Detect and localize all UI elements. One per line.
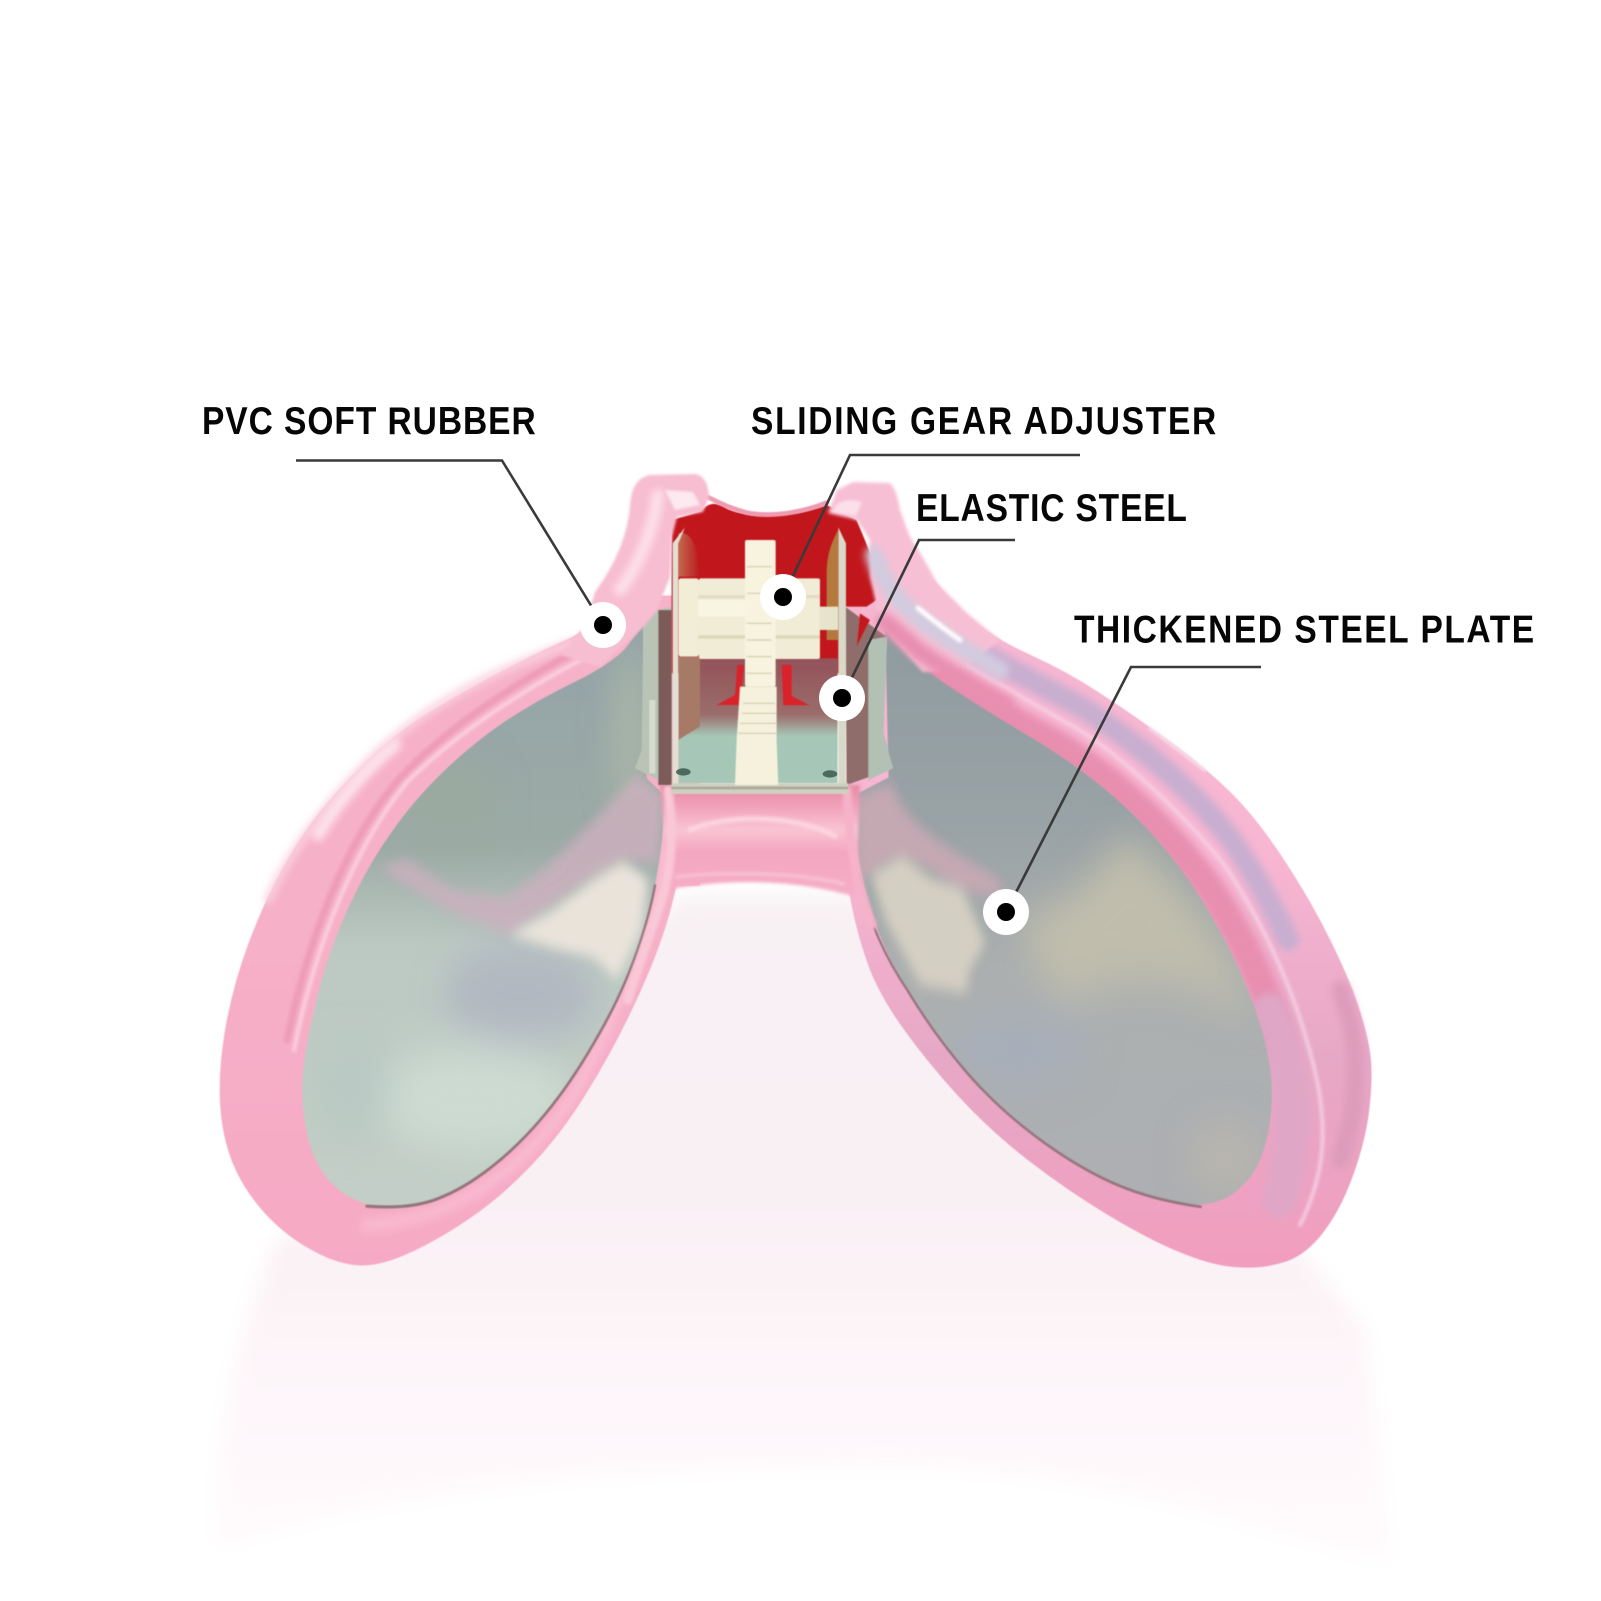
steel frame bars: [672, 527, 848, 794]
right rim lower lilac band: [1270, 1010, 1292, 1200]
right rim lavender band: [935, 628, 1288, 940]
left rim groove shade: [287, 644, 590, 1040]
right lens cream highlight: [871, 856, 985, 993]
leader line: thickened steel plate: [1006, 667, 1261, 912]
left lens pink band: [380, 774, 665, 935]
right wing: [846, 580, 1372, 1268]
leader line: PVC soft rubber: [296, 460, 603, 625]
bridge between wings: [628, 785, 872, 1000]
left neck clip notch: [665, 490, 700, 510]
callout: elastic steel: [819, 486, 1187, 721]
label: elastic steel: ELASTIC STEEL: [916, 486, 1187, 530]
red feet: [717, 665, 809, 705]
left wing: [220, 596, 700, 1265]
bridge lower line: [675, 874, 845, 884]
right rim upper glint: [1150, 728, 1205, 770]
right neck of rubber shell: [828, 482, 1000, 672]
left lens dark edge: [367, 886, 655, 1207]
right wing rim: [846, 580, 1372, 1268]
right lens pink band: [855, 782, 1003, 895]
left wing rim: [220, 596, 700, 1265]
lower chamber reflection: [678, 657, 838, 783]
marker: sliding gear adjuster: [760, 574, 806, 620]
rust side strips: [678, 530, 838, 640]
left lens cream highlight: [510, 861, 648, 979]
marker: PVC soft rubber: [580, 602, 626, 648]
bridge highlight arc: [690, 819, 835, 836]
left neck of rubber shell: [560, 474, 709, 667]
leader line: sliding gear adjuster: [783, 455, 1080, 597]
marker: elastic steel: [819, 675, 865, 721]
red housing: [672, 504, 877, 673]
right rim outer tone: [1340, 990, 1356, 1160]
right steel side: [845, 607, 893, 785]
label: PVC soft rubber: PVC SOFT RUBBER: [202, 399, 536, 443]
bridge body: [660, 785, 860, 897]
left lens reflection patches: [394, 661, 642, 1147]
callout: thickened steel plate: [983, 607, 1534, 935]
right rim ridge: [890, 625, 1323, 1225]
right neck lavender highlight: [874, 555, 1000, 670]
leader line: elastic steel: [842, 540, 1015, 698]
left rim outer soft edge: [268, 642, 575, 900]
left seam: [628, 790, 671, 1000]
left lower rim ridge: [363, 792, 672, 1225]
floor reflection: [217, 895, 1391, 1562]
left steel side: [635, 607, 672, 787]
callout: sliding gear adjuster: [751, 399, 1216, 620]
right lens khaki reflection: [1000, 832, 1246, 1178]
marker: thickened steel plate: [983, 889, 1029, 935]
right seam: [847, 790, 872, 925]
pink arch over housing: [708, 497, 827, 515]
callout: PVC soft rubber: [202, 399, 626, 648]
left lens: [302, 625, 665, 1208]
label: sliding gear adjuster: SLIDING GEAR ADJUSTER: [751, 399, 1216, 443]
central mechanism: [635, 497, 893, 794]
right neck glint: [918, 608, 960, 640]
screw holes: [676, 768, 837, 778]
left rim ridge highlight: [294, 650, 600, 1050]
right neck lower pink: [885, 622, 1005, 704]
right rim deep pink band: [890, 652, 1280, 1040]
right neck clip notch: [832, 500, 862, 516]
label: thickened steel plate: THICKENED STEEL PLATE: [1074, 607, 1534, 651]
infographic: labelled product diagram: [204, 407, 1533, 1427]
right lens dark edge: [859, 874, 1201, 1207]
cream gear assembly: [678, 540, 838, 785]
right lens: [854, 626, 1272, 1207]
left neck highlight: [620, 495, 658, 590]
left rim outer highlight: [318, 745, 395, 835]
